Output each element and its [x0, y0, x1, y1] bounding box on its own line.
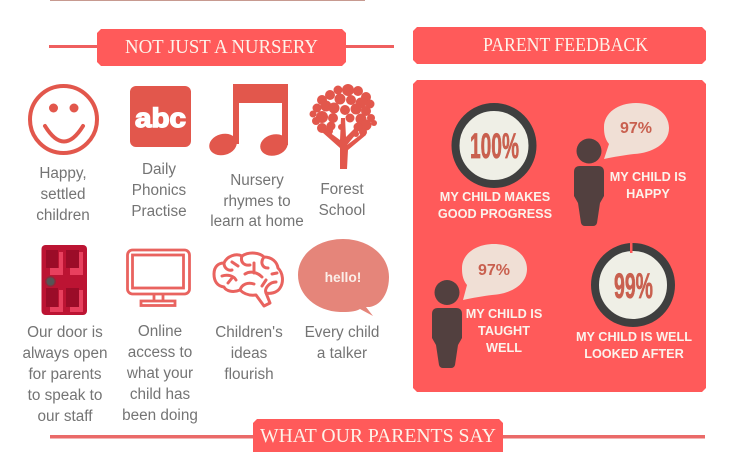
text: every child a talker: Every child [305, 324, 379, 341]
text: taught well: WELL [486, 341, 522, 355]
text: door open: always open [22, 345, 108, 362]
heading: what our parents say [50, 419, 705, 452]
icon: person with 97% bubble [574, 103, 669, 226]
icon: computer monitor [128, 250, 190, 306]
text: nursery rhymes: rhymes to [223, 193, 291, 210]
text: looked after: MY CHILD IS WELL [576, 330, 692, 344]
text: nursery rhymes: Nursery [230, 172, 284, 189]
text: door open: to speak to [28, 387, 102, 404]
text: ideas flourish: ideas [231, 345, 268, 362]
text: daily phonics practise: Practise [131, 203, 187, 220]
icon: tree [310, 84, 377, 169]
chart: 99% ring: 99% [614, 267, 653, 306]
text: happy: HAPPY [626, 187, 670, 201]
text: good progress: MY CHILD MAKES [440, 190, 550, 204]
chart: 100% ring [456, 107, 532, 184]
icon: abc block: abc [135, 103, 186, 133]
text: online access: what your [126, 365, 193, 382]
heading: not just a nursery [49, 29, 394, 66]
icon: person with 97% bubble: 97% [620, 120, 652, 137]
panel: parent feedback [413, 80, 706, 392]
icon: abc block [130, 86, 191, 147]
text: door open: our staff [38, 408, 93, 425]
text: daily phonics practise: Daily [142, 161, 176, 178]
icon: person with second 97% bubble: 97% [478, 262, 510, 279]
heading: parent feedback [413, 27, 706, 64]
text: door open: for parents [28, 366, 102, 383]
text: forest school: School [319, 202, 365, 219]
text: taught well: MY CHILD IS [466, 307, 542, 321]
text: looked after: LOOKED AFTER [584, 347, 684, 361]
text: ideas flourish: flourish [224, 366, 274, 383]
heading: what our parents say: WHAT OUR PARENTS SAY [260, 425, 496, 447]
text: happy: MY CHILD IS [610, 170, 686, 184]
icon: person with second 97% bubble [432, 244, 527, 368]
text: taught well: TAUGHT [478, 324, 530, 338]
heading: parent feedback: PARENT FEEDBACK [483, 34, 648, 56]
text: happy settled children: settled [40, 186, 86, 203]
text: daily phonics practise: Phonics [132, 182, 187, 199]
text: nursery rhymes: learn at home [210, 213, 304, 230]
text: good progress: GOOD PROGRESS [438, 207, 552, 221]
text: forest school: Forest [320, 181, 364, 198]
chart: 100% ring: 100% [470, 127, 519, 166]
icon: hello speech bubble: hello! [325, 270, 361, 285]
chart: 99% ring [595, 243, 671, 323]
icon: red door [42, 245, 87, 315]
icon: smiley face [30, 86, 97, 153]
heading: not just a nursery: NOT JUST A NURSERY [125, 36, 318, 58]
text: door open: Our door is [27, 324, 103, 341]
text: happy settled children: children [36, 207, 90, 224]
icon: brain [214, 253, 282, 306]
icon: hello speech bubble [298, 239, 389, 316]
text: online access: child has [130, 386, 191, 403]
text: online access: access to [128, 344, 192, 361]
text: happy settled children: Happy, [39, 165, 87, 182]
text: online access: been doing [122, 407, 198, 424]
text: online access: Online [138, 323, 182, 340]
icon: music notes [207, 84, 290, 159]
text: every child a talker: a talker [317, 345, 367, 362]
text: ideas flourish: Children's [215, 324, 283, 341]
